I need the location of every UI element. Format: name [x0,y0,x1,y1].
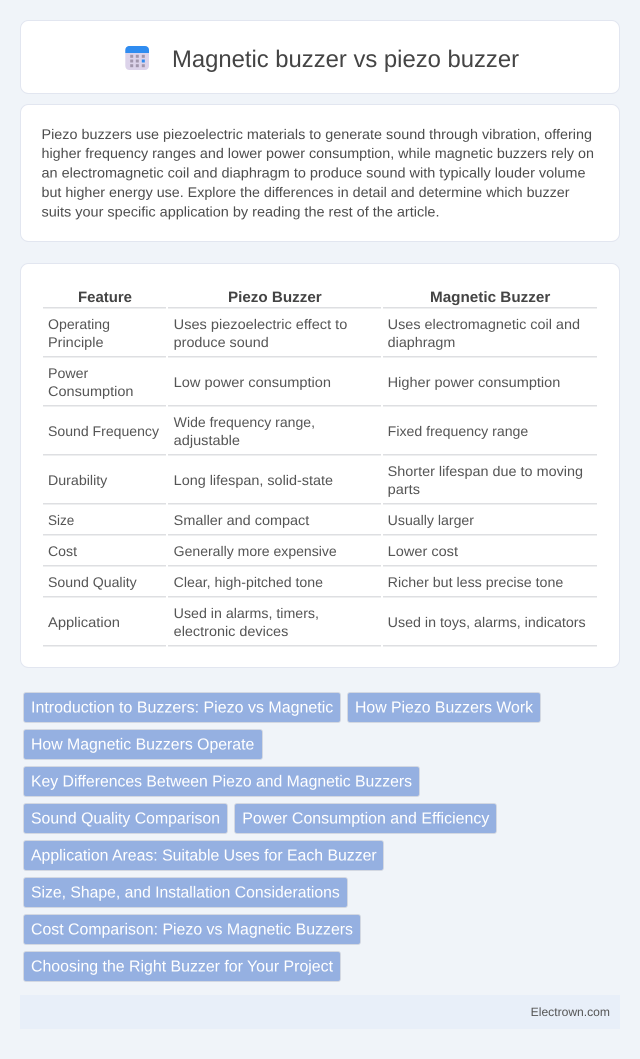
title: Magnetic buzzer vs piezo buzzer [172,46,519,73]
row: durability: parts [388,481,420,497]
row: application [43,605,597,646]
row: durability [43,463,597,504]
chip: choosing the right buzzer [24,952,340,982]
row: sound frequency: Wide frequency range, [174,414,315,430]
chip: application areas [24,840,384,870]
row: operating principle: Uses electromagnetic coil and [388,316,580,332]
row: power consumption: Low power consumption [174,374,331,390]
row: cost [43,543,597,566]
panel: topic links [24,692,540,982]
intro paragraph [42,126,594,219]
chip: how magnetic buzzers operate [24,730,262,760]
chip: sound quality comparison [24,804,228,834]
row: cost: Cost [48,543,77,559]
table header row: Piezo Buzzer [228,289,322,306]
row: operating principle [43,316,597,358]
panel: intro [20,104,620,242]
row: sound frequency: adjustable [174,432,240,448]
row: sound quality: Richer but less precise tone [388,574,564,590]
row: cost: Lower cost [388,543,458,559]
chip: size, shape, installation [24,878,348,908]
chip: introduction [24,692,340,722]
row: sound quality [43,574,597,598]
chip: power consumption and efficiency [234,804,496,834]
chip: choosing the right buzzer: Choosing the Right Buzzer for Your Project [31,959,334,976]
row: sound quality: Sound Quality [48,574,137,590]
footer: Electrown.com [531,1005,610,1019]
chip: key differences [24,766,420,796]
row: size: Smaller and compact [174,512,309,528]
chip: sound quality comparison: Sound Quality Comparison [31,811,220,828]
chip: cost comparison: Cost Comparison: Piezo vs Magnetic Buzzers [31,922,353,939]
chip: application areas: Application Areas: Suitable Uses for Each Buzzer [31,848,377,865]
row: operating principle: diaphragm [388,334,455,350]
row: sound frequency: Sound Frequency [48,423,159,439]
chip: how piezo buzzers work [348,692,540,722]
row: durability: Shorter lifespan due to moving [388,463,583,479]
row: operating principle: Uses piezoelectric effect to [174,316,348,332]
row: application: electronic devices [174,623,288,639]
chip: key differences: Key Differences Between Piezo and Magnetic Buzzers [31,774,412,791]
row: power consumption: Higher power consumption [388,374,560,390]
row: operating principle: produce sound [174,334,269,350]
row: sound frequency: Fixed frequency range [388,423,529,439]
row: size: Usually larger [388,512,474,528]
intro paragraph: suits your specific application by reading the rest of the article. [42,203,440,219]
row: power consumption: Power [48,365,89,381]
chip: power consumption and efficiency: Power Consumption and Efficiency [242,811,489,828]
icon: calendar grid [125,46,149,70]
chip: cost comparison [24,914,360,944]
chip: how magnetic buzzers operate: How Magnetic Buzzers Operate [31,737,254,754]
row: power consumption: Consumption [48,383,134,399]
panel: comparison table [20,264,620,668]
table header row: Magnetic Buzzer [430,289,550,306]
row: size: Size [48,512,75,528]
row: application: Application [48,614,120,630]
row: durability: Durability [48,472,107,488]
row: operating principle: Principle [48,334,104,350]
intro paragraph: Piezo buzzers use piezoelectric materials to generate sound through vibration, offering [42,126,592,142]
header card [20,20,620,94]
row: application: Used in toys, alarms, indicators [388,614,586,630]
table header row: Feature [78,289,132,306]
footer [20,995,620,1029]
row: cost: Generally more expensive [174,543,337,559]
row: size [43,512,597,536]
chip: introduction: Introduction to Buzzers: Piezo vs Magnetic [31,700,333,717]
intro paragraph: an electromagnetic coil and diaphragm to produce sound with typically louder volume [42,164,586,180]
row: sound frequency [43,414,597,456]
table header row [43,289,597,308]
chip: how piezo buzzers work: How Piezo Buzzers Work [355,700,534,717]
row: sound quality: Clear, high-pitched tone [174,574,323,590]
intro paragraph: but higher energy use. Explore the differences in detail and determine which buzzer [42,184,570,200]
chip: size, shape, installation: Size, Shape, and Installation Considerations [31,885,340,902]
row: power consumption [43,365,597,406]
intro paragraph: higher frequency ranges and lower power consumption, while magnetic buzzers rely on [42,145,594,161]
row: application: Used in alarms, timers, [174,605,319,621]
row: durability: Long lifespan, solid-state [174,472,333,488]
row: operating principle: Operating [48,316,110,332]
